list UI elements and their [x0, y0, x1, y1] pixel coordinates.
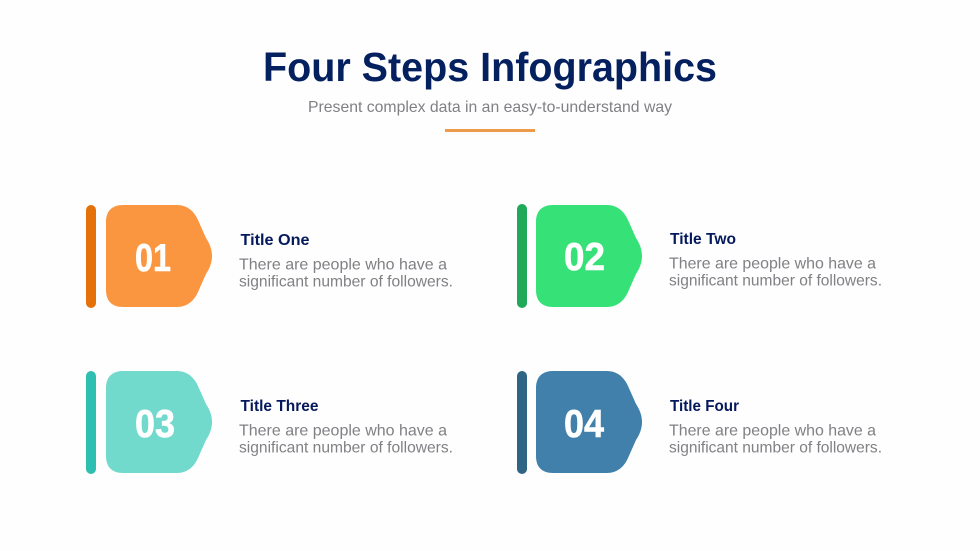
- heading: title one: Title One: [240, 232, 310, 249]
- text block: step three: significant number of followers.: [239, 440, 453, 456]
- number: 04: 04: [564, 403, 604, 446]
- subtitle: Present complex data in an easy-to-understand way: [308, 99, 672, 116]
- badge shape: step two: [536, 205, 642, 307]
- panel: step three: [86, 371, 453, 474]
- badge shape: step three: [106, 371, 212, 473]
- accent underline: [445, 129, 535, 132]
- accent bar: step two: [517, 204, 527, 308]
- panel: step two: [517, 204, 882, 308]
- accent bar: step one: [86, 205, 96, 308]
- text block: step one: significant number of followers.: [239, 274, 453, 290]
- heading: title four: Title Four: [670, 398, 739, 415]
- text block: step three: There are people who have a: [239, 422, 447, 440]
- heading: title three: Title Three: [240, 398, 319, 415]
- number: 03: 03: [135, 403, 175, 446]
- text block: step two: significant number of followers.: [669, 272, 882, 290]
- text block: step two: There are people who have a: [669, 256, 876, 272]
- accent bar: step four: [517, 371, 527, 474]
- text block: step four: There are people who have a: [669, 422, 876, 440]
- badge shape: step one: [106, 205, 212, 307]
- text block: step one: There are people who have a: [239, 256, 447, 274]
- badge shape: step four: [536, 371, 642, 473]
- accent bar: step three: [86, 371, 96, 474]
- panel: step four: [517, 371, 882, 474]
- title: Four Steps Infographics: [263, 44, 717, 90]
- heading: title two: Title Two: [670, 231, 736, 248]
- text block: step four: significant number of followers.: [669, 440, 882, 456]
- number: 02: 02: [564, 236, 605, 279]
- number: 01: 01: [135, 237, 171, 280]
- panel: step one: [86, 205, 453, 308]
